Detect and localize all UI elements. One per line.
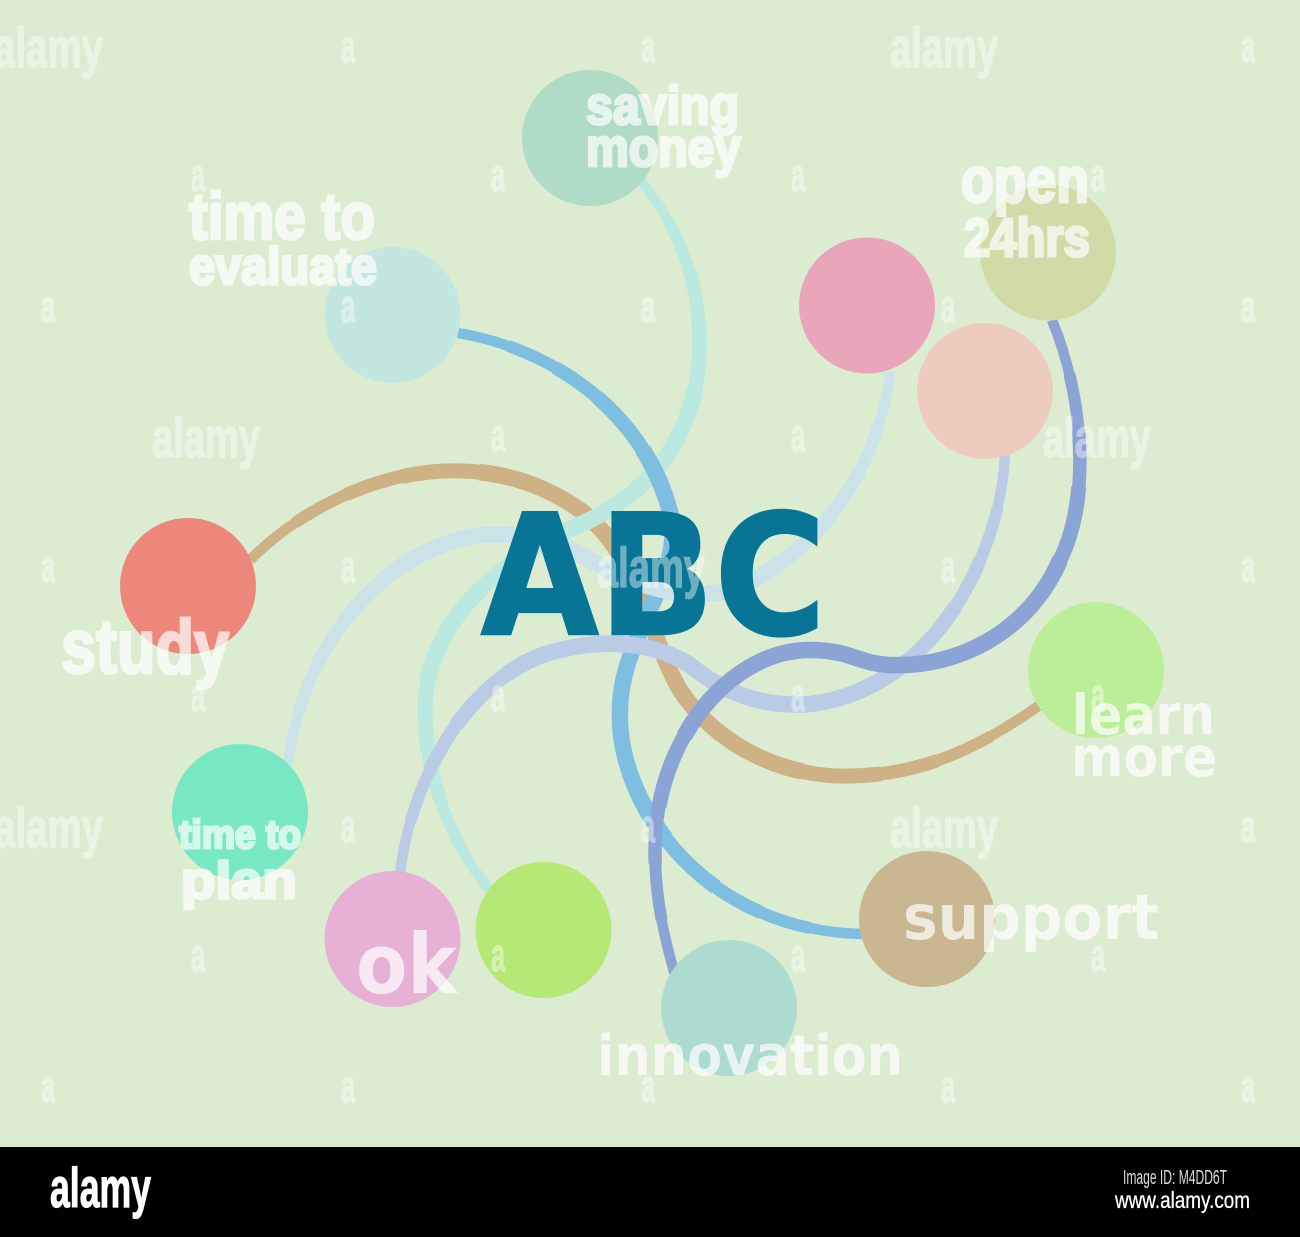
watermark pattern: a xyxy=(1241,20,1255,72)
node: time to evaluate xyxy=(324,247,460,383)
node: lime xyxy=(476,862,612,998)
watermark pattern: a xyxy=(191,929,205,981)
watermark pattern: a xyxy=(1241,280,1255,332)
label: time to evaluate: evaluate xyxy=(189,238,377,296)
node: time to plan xyxy=(172,744,308,880)
curve: open 24hrs to innovation xyxy=(655,320,1080,975)
watermark pattern: alamy xyxy=(890,16,998,79)
watermark pattern: alamy xyxy=(890,796,998,859)
watermark pattern: a xyxy=(341,800,355,852)
watermark pattern: a xyxy=(191,669,205,721)
watermark pattern: a xyxy=(41,280,55,332)
label: time to plan: plan xyxy=(181,852,297,910)
circle nodes xyxy=(120,70,1164,1076)
watermark pattern: a xyxy=(941,280,955,332)
watermark pattern: a xyxy=(341,280,355,332)
footer logo: alamy xyxy=(50,1156,151,1219)
watermark pattern: alamy xyxy=(597,536,705,599)
watermark pattern: a xyxy=(491,669,505,721)
node: learn more xyxy=(1028,602,1164,738)
website: www.alamy.com xyxy=(1114,1187,1250,1213)
watermark pattern: a xyxy=(491,929,505,981)
curve: peach circle to ok xyxy=(400,455,1005,875)
label: time to evaluate xyxy=(189,179,377,296)
watermark pattern: a xyxy=(41,1060,55,1112)
central title: ABC xyxy=(481,480,826,674)
watermark pattern: a xyxy=(791,929,805,981)
node: saving money xyxy=(522,70,658,206)
node: study xyxy=(120,518,256,654)
node: pink xyxy=(799,238,935,374)
footer bar xyxy=(0,1147,1300,1237)
curve: pink circle to time to plan xyxy=(288,372,890,765)
watermark pattern: alamy xyxy=(1043,406,1151,469)
label: open 24hrs xyxy=(961,144,1090,268)
watermark pattern: a xyxy=(1091,669,1105,721)
label: time to plan: time to xyxy=(179,813,301,857)
label: study: study xyxy=(61,605,229,690)
label: support: support xyxy=(903,881,1159,954)
watermark pattern: a xyxy=(1241,1060,1255,1112)
watermark pattern: a xyxy=(941,1060,955,1112)
label: open 24hrs: open xyxy=(961,144,1089,216)
node: support xyxy=(859,851,995,987)
curve: study to learn more xyxy=(250,471,1040,776)
label: time to evaluate: time to xyxy=(189,179,375,253)
watermark pattern: a xyxy=(641,1060,655,1112)
label: saving money: money xyxy=(586,118,741,178)
node: peach xyxy=(917,323,1053,459)
curve: time to evaluate to support xyxy=(458,333,862,934)
watermark pattern: a xyxy=(641,20,655,72)
curve: saving money to lime circle xyxy=(425,180,700,890)
label: learn more xyxy=(1071,683,1217,789)
watermark pattern: a xyxy=(791,669,805,721)
node: ok xyxy=(324,871,460,1007)
watermark pattern: a xyxy=(641,800,655,852)
label: ok: ok xyxy=(356,916,459,1013)
watermark pattern: a xyxy=(1241,800,1255,852)
label: innovation: innovation xyxy=(597,1024,903,1089)
label: open 24hrs: 24hrs xyxy=(964,208,1090,268)
watermark pattern: a xyxy=(341,540,355,592)
watermark pattern: a xyxy=(491,149,505,201)
node: open 24hrs xyxy=(980,184,1116,320)
watermark pattern: a xyxy=(1091,149,1105,201)
label: learn more: more xyxy=(1071,725,1217,789)
label: saving money: saving xyxy=(586,76,739,136)
watermark pattern: a xyxy=(341,20,355,72)
watermark pattern: a xyxy=(641,280,655,332)
watermark pattern: a xyxy=(341,1060,355,1112)
image id: Image ID: M4DD6T xyxy=(1123,1167,1227,1189)
watermark pattern: a xyxy=(791,409,805,461)
node labels xyxy=(61,76,1217,1089)
watermark pattern: a xyxy=(941,540,955,592)
label: learn more: learn xyxy=(1072,683,1215,747)
label: time to plan xyxy=(179,813,301,910)
connector curves xyxy=(250,180,1080,975)
label: saving money xyxy=(586,76,741,178)
watermark pattern: a xyxy=(791,149,805,201)
watermark pattern: a xyxy=(1091,929,1105,981)
watermark pattern: a xyxy=(191,149,205,201)
watermark pattern: alamy xyxy=(152,406,260,469)
node: innovation xyxy=(661,940,797,1076)
watermark pattern: a xyxy=(1241,540,1255,592)
watermark pattern: a xyxy=(491,409,505,461)
watermark pattern: a xyxy=(41,540,55,592)
